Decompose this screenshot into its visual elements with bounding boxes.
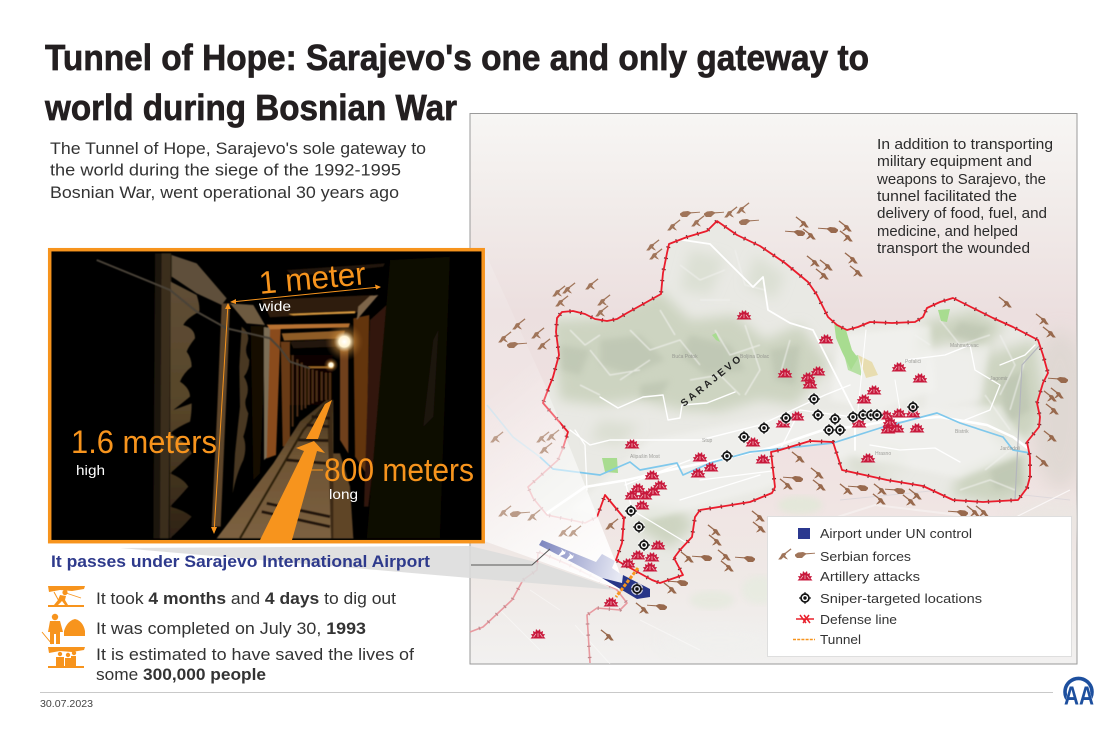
map place names: Bistrik (955, 429, 969, 435)
tunnel route (616, 568, 638, 597)
legend (768, 516, 1072, 656)
icons: artillery attacks (530, 310, 928, 638)
label: 1 meter wide: wide (258, 298, 291, 314)
map place names: Pofalići (905, 359, 921, 365)
map note: transport the wounded (877, 241, 1030, 257)
fact: digging duration (48, 586, 396, 608)
map note: medicine, and helped (877, 224, 1018, 240)
floor (216, 399, 334, 539)
footer rule and date: 30.07.2023 (40, 698, 93, 710)
map place names: Alipašin Most (630, 454, 660, 460)
legend item: Serbian forces (778, 549, 912, 564)
airport heading: It passes under Sarajevo International Airport (51, 552, 430, 571)
ceiling (262, 295, 373, 317)
fact: lives saved (48, 646, 414, 684)
map terrain inside the defense line (546, 239, 1047, 554)
map place names: Mahmutovac (950, 343, 979, 349)
tunnel photo (50, 250, 483, 542)
map note: tunnel facilitated the (877, 189, 1017, 205)
icons: Serbian forces tanks (507, 211, 1068, 610)
map place names: Buća Potok (672, 354, 698, 360)
map place names: Hrasno (875, 451, 891, 457)
right posts (340, 348, 348, 453)
map note (876, 137, 1053, 257)
map note: weapons to Sarajevo, the (876, 172, 1046, 188)
fact: lives saved: some 300,000 people (96, 666, 266, 684)
intro text: Bosnian War, went operational 30 years ago (50, 184, 399, 202)
label: 1 meter wide: 1 meter (257, 255, 368, 301)
map note: delivery of food, fuel, and (877, 206, 1047, 222)
legend item: Serbian forces: Serbian forces (820, 549, 912, 564)
map place names: Jarčedoli (1000, 446, 1020, 452)
icon: digger (48, 586, 85, 607)
fact: digging duration: It took 4 months and 4 days to dig out (96, 590, 396, 608)
label: 800 meters long (324, 452, 474, 502)
length arrow (260, 441, 325, 540)
map label: Sarajevo: SARAJEVO (679, 353, 745, 409)
map place names: Stup (702, 438, 713, 444)
grey wedge from airport heading to airport (120, 546, 617, 590)
legend item: tunnel: Tunnel (820, 632, 861, 647)
legend item: artillery attacks: Artillery attacks (820, 569, 921, 584)
defense line (470, 221, 1048, 663)
logo: Anadolu Agency: AA (1064, 680, 1094, 710)
width arrow (231, 287, 380, 302)
icons: sniper-targeted locations (625, 393, 919, 595)
legend item: defense line: Defense line (820, 612, 897, 627)
label: 1.6 meters high: 1.6 meters (71, 424, 217, 460)
intro text (50, 140, 426, 202)
title: Tunnel of Hope: Sarajevo's one and only gateway to (45, 37, 869, 78)
label: 1.6 meters high: high (76, 462, 105, 478)
fact: lives saved: It is estimated to have saved the lives of (96, 646, 414, 664)
intro text: the world during the siege of the 1992-1995 (50, 162, 401, 180)
map place names (630, 343, 1020, 460)
fact: completion date (42, 614, 366, 644)
legend item: tunnel (793, 632, 861, 647)
far tunnel (290, 355, 333, 405)
map note: In addition to transporting (877, 137, 1053, 153)
highlight wedge from photo to tunnel (484, 250, 626, 592)
title: world during Bosnian War (44, 87, 457, 128)
label: 800 meters long: long (329, 486, 358, 502)
map note: military equipment and (877, 154, 1032, 170)
icon: people in tunnel (48, 647, 85, 668)
label: 1.6 meters high (71, 424, 217, 478)
left wall (153, 253, 172, 538)
fact: completion date: It was completed on July 30, 1993 (96, 620, 366, 638)
pipe (97, 260, 310, 368)
label: 800 meters long: 800 meters (324, 452, 474, 488)
legend item: sniper-targeted locations: Sniper-targeted locations (820, 591, 983, 606)
map place names: Boljina Dolac (740, 354, 770, 360)
title (44, 37, 869, 128)
airport under UN control (471, 540, 650, 599)
height arrow (214, 304, 228, 533)
river Miljacka (540, 413, 1030, 475)
map place names: Jagomir (990, 376, 1008, 382)
intro text: The Tunnel of Hope, Sarajevo's sole gateway to (50, 140, 426, 158)
map panel background (470, 114, 1090, 664)
legend item: airport under UN control: Airport under UN control (820, 526, 972, 541)
icon: worker and tunnel mouth (42, 614, 85, 644)
icons: Serbian forces artillery guns (490, 203, 1064, 641)
